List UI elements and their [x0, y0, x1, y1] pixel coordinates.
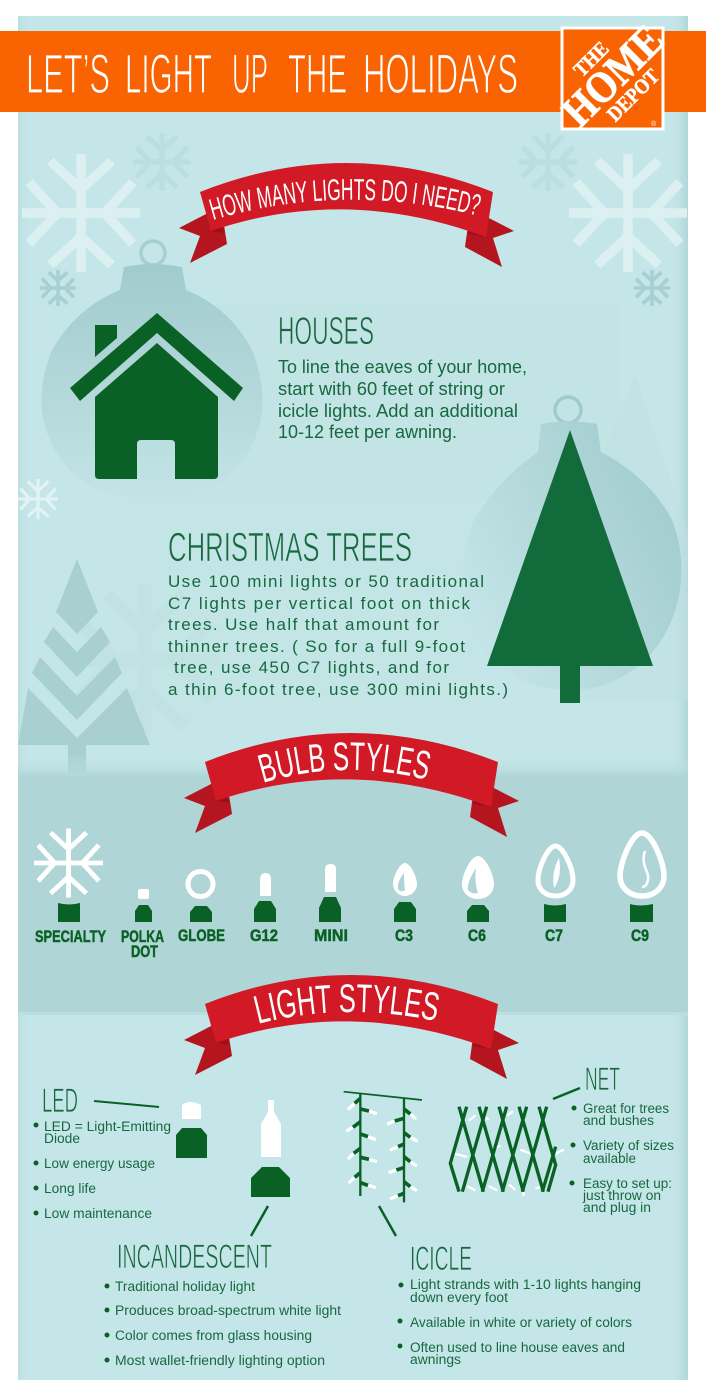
banner: light styles	[184, 975, 519, 1079]
LED list: Diode	[44, 1131, 80, 1146]
incandescent list	[104, 1279, 341, 1368]
net pointer line	[553, 1088, 580, 1099]
net list: Variety of sizes	[583, 1138, 674, 1153]
snowflake: small right	[634, 270, 670, 306]
bulb: polka dot	[121, 889, 164, 961]
net heading: NET	[585, 1061, 620, 1097]
bulb: C3	[393, 863, 417, 945]
snowflake: large left	[22, 154, 140, 272]
ornament behind house	[42, 241, 263, 500]
incandescent bulb	[251, 1100, 290, 1197]
text: houses	[278, 357, 527, 442]
net list: and plug in	[583, 1200, 651, 1215]
net lights illustration	[450, 1107, 563, 1195]
snowflake: faint upper right	[519, 133, 577, 191]
LED list: Low maintenance	[44, 1206, 152, 1221]
icicle list: Light strands with 1-10 lights hanging	[410, 1277, 641, 1292]
net list: available	[583, 1151, 636, 1166]
LED heading: LED	[42, 1082, 78, 1120]
incandescent list: Traditional holiday light	[115, 1279, 255, 1294]
label: specialty: SPECIALTY	[35, 927, 106, 946]
label: mini: MINI	[314, 926, 348, 945]
icicle list: Often used to line house eaves and	[410, 1340, 625, 1355]
text: christmas trees: C7 lights per vertical foot on thick	[168, 594, 471, 613]
text: houses: icicle lights. Add an additional	[278, 401, 518, 421]
banner: how many lights: HOW MANY LIGHTS DO I NEED?	[208, 179, 481, 220]
snowflake: faint upper left	[133, 133, 191, 191]
icicle lights illustration	[344, 1092, 422, 1202]
LED bulb	[176, 1102, 207, 1158]
net list	[570, 1101, 674, 1215]
title: THE	[288, 42, 347, 105]
icicle heading: ICICLE	[410, 1240, 472, 1278]
net list: and bushes	[583, 1113, 654, 1128]
label: polka dot: POLKA	[121, 927, 164, 946]
text: christmas trees: a thin 6-foot tree, use 300 mini lights.)	[168, 680, 508, 699]
title: HOLIDAYS	[363, 42, 518, 105]
net list: Great for trees	[583, 1101, 669, 1116]
LED list	[34, 1119, 171, 1221]
logo: The Home Depot: HOME	[552, 15, 673, 136]
label: polka dot: DOT	[131, 942, 158, 961]
LED list: Long life	[44, 1181, 96, 1196]
text: houses: start with 60 feet of string or	[278, 379, 505, 399]
bulb: globe	[178, 872, 225, 945]
label: G12: G12	[250, 926, 278, 945]
banner: bulb styles	[184, 733, 519, 837]
icicle pointer line	[379, 1206, 396, 1236]
house icon	[70, 313, 243, 479]
incandescent pointer line	[251, 1206, 268, 1236]
banner: light styles: LIGHT STYLES	[254, 984, 439, 1024]
snowflake: white left	[18, 479, 58, 519]
icicle list: down every foot	[410, 1290, 508, 1305]
snowflake: small left	[40, 270, 76, 306]
label: C3: C3	[395, 926, 413, 945]
heading: christmas trees: CHRISTMAS TREES	[168, 524, 412, 570]
label: C9: C9	[631, 926, 649, 945]
text: christmas trees: trees. Use half that amount for	[168, 615, 439, 634]
icicle list	[398, 1277, 641, 1367]
bulb: mini	[314, 864, 348, 945]
snowflake: faint behind text	[70, 585, 220, 735]
bulb: C7	[538, 846, 573, 945]
icicle list: awnings	[410, 1352, 461, 1367]
snowflake: large right	[569, 154, 687, 272]
label: polka dot	[121, 927, 164, 961]
incandescent list: Color comes from glass housing	[115, 1328, 312, 1343]
logo: The Home Depot: THE	[568, 36, 614, 82]
LED list: LED = Light-Emitting	[44, 1119, 171, 1134]
text: christmas trees	[168, 572, 508, 699]
logo: The Home Depot: ®	[651, 120, 657, 128]
title	[26, 42, 518, 105]
heading: houses: HOUSES	[278, 310, 374, 353]
text: christmas trees: thinner trees. ( So for a full 9-foot	[168, 637, 465, 656]
header bar	[0, 31, 706, 112]
banner: bulb styles: BULB STYLES	[258, 742, 430, 782]
bulb: C6	[462, 856, 494, 945]
bulb: specialty	[34, 828, 106, 946]
tree icon	[487, 430, 653, 703]
title: LIGHT	[125, 42, 212, 105]
background decorative tree	[18, 559, 150, 773]
bulb: C9	[620, 833, 664, 945]
icicle list: Available in white or variety of colors	[410, 1315, 632, 1330]
label: C7: C7	[545, 926, 563, 945]
label: C6: C6	[468, 926, 486, 945]
net list: Easy to set up:	[583, 1176, 672, 1191]
ornament behind tree	[463, 397, 681, 690]
title: LET’S	[26, 42, 110, 105]
bulb: G12	[250, 873, 278, 945]
net list: just throw on	[582, 1188, 661, 1203]
title: UP	[232, 42, 268, 105]
incandescent list: Produces broad-spectrum white light	[115, 1303, 341, 1318]
bulb styles band	[18, 755, 688, 1015]
banner: how many lights	[179, 163, 514, 267]
incandescent heading: INCANDESCENT	[117, 1238, 272, 1276]
text: houses: To line the eaves of your home,	[278, 357, 527, 377]
incandescent list: Most wallet-friendly lighting option	[115, 1353, 325, 1368]
label: globe: GLOBE	[178, 926, 225, 945]
text: christmas trees: Use 100 mini lights or 50 traditional	[168, 572, 484, 591]
text: houses: 10-12 feet per awning.	[278, 422, 457, 442]
text: christmas trees: tree, use 450 C7 lights, and for	[174, 658, 449, 677]
LED pointer line	[94, 1101, 159, 1107]
LED list: Low energy usage	[44, 1156, 155, 1171]
logo: The Home Depot: DEPOT	[602, 64, 664, 126]
